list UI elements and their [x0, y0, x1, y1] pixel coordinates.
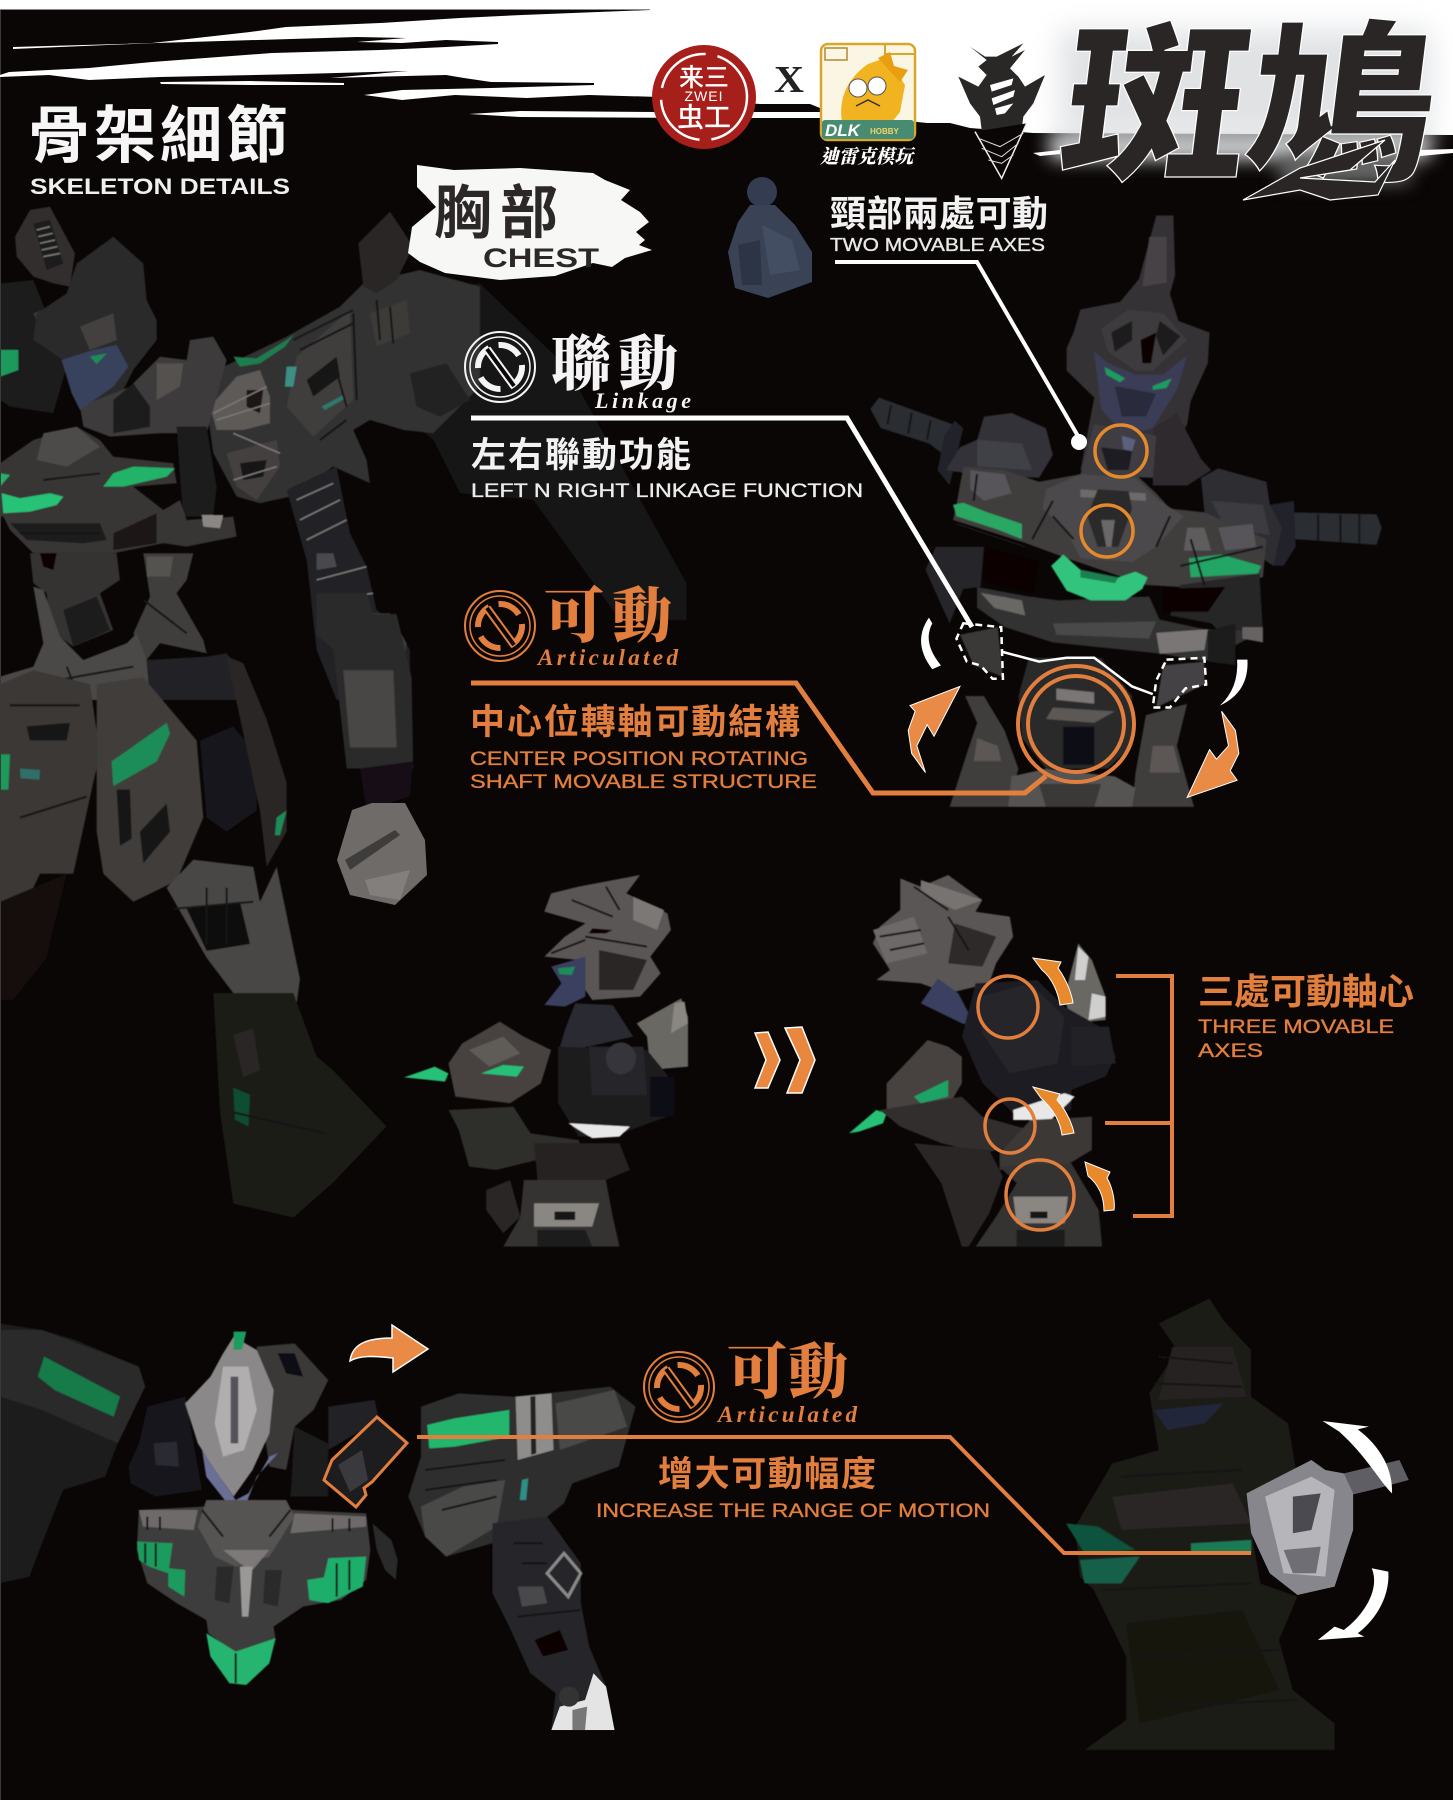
brush patch: chest — [408, 165, 652, 280]
heading: skeleton details: 骨架細節 — [28, 102, 288, 171]
centre axis text — [470, 703, 817, 793]
cross mark: X — [774, 59, 804, 101]
heading: skeleton details: SKELETON DETAILS — [30, 174, 290, 199]
white leader: neck — [835, 262, 1087, 450]
DLK chinese label: 迪雷克模玩 — [819, 146, 916, 168]
linkage text: 左右聯動功能 — [471, 436, 691, 475]
bottom middle forearm — [408, 1387, 636, 1730]
orange leader: centre axis — [471, 683, 1046, 793]
dashed linkage boxes and connector — [956, 623, 1206, 708]
faded lower body — [0, 593, 413, 1218]
logo: ZWEI round badge — [652, 45, 756, 149]
silver shoulder — [1247, 1460, 1409, 1595]
neck callout text: TWO MOVABLE AXES — [830, 235, 1045, 255]
three axes text — [1198, 971, 1414, 1062]
logo: DLK hobby card — [821, 44, 915, 140]
faded upper body — [0, 207, 687, 700]
side robot: before — [404, 875, 688, 1247]
bracket — [1105, 976, 1172, 1216]
three axes text: 三處可動軸心 — [1198, 971, 1414, 1012]
orange rotation arrows — [908, 686, 1239, 797]
logo: ZWEI round badge: ZWEI — [684, 88, 724, 104]
range of motion text: INCREASE THE RANGE OF MOTION — [596, 1501, 990, 1522]
logo: DLK hobby card: HOBBY — [870, 127, 900, 136]
white hand — [551, 1673, 615, 1730]
brush patch: chest: CHEST — [483, 243, 600, 273]
faded full robot — [0, 207, 687, 1218]
white leader: linkage — [471, 418, 972, 627]
three axes text: AXES — [1198, 1041, 1263, 1062]
range of motion text — [596, 1455, 990, 1522]
neck bust part — [728, 177, 812, 298]
articulated icon — [465, 591, 535, 661]
brush header band — [0, 0, 1453, 135]
linkage text: LEFT N RIGHT LINKAGE FUNCTION — [471, 481, 863, 502]
articulated heading: 可動 — [544, 584, 672, 650]
logo: shield emblem — [958, 43, 1045, 178]
double chevron arrow — [755, 1027, 815, 1093]
three axes text: THREE MOVABLE — [1198, 1017, 1394, 1038]
title calligraphy: 斑鳩 — [1051, 11, 1447, 203]
white rotation arrows — [921, 618, 1248, 706]
articulated heading lower — [716, 1340, 858, 1427]
range of motion text: 增大可動幅度 — [658, 1455, 876, 1494]
side robot: after — [849, 875, 1116, 1247]
motion hexagon outline — [324, 1417, 407, 1507]
three joint circles — [978, 976, 1074, 1230]
white swing arrows — [1318, 1421, 1392, 1640]
linkage heading: Linkage — [594, 388, 691, 413]
neck callout text — [830, 193, 1048, 255]
articulated icon lower — [644, 1352, 714, 1422]
articulated heading lower: Articulated — [716, 1402, 858, 1427]
centre axis text: CENTER POSITION ROTATING — [470, 749, 808, 770]
neck joint circles — [1081, 425, 1147, 557]
logo: ZWEI round badge: 来三 — [679, 64, 729, 92]
orange motion arrow — [350, 1325, 428, 1372]
logo: ZWEI round badge: 虫工 — [677, 103, 731, 133]
brush patch: chest: 胸部 — [434, 181, 558, 246]
linkage text — [471, 436, 863, 502]
bottom left arm and chest robot — [0, 1323, 398, 1685]
faded fist — [337, 803, 427, 905]
neck callout text: 頸部兩處可動 — [830, 193, 1048, 234]
centre torso robot — [870, 216, 1382, 807]
small curved arrows — [1033, 958, 1114, 1211]
centre axis text: SHAFT MOVABLE STRUCTURE — [470, 772, 817, 793]
articulated heading — [536, 584, 678, 670]
orange leader: range of motion — [417, 1437, 1251, 1553]
waist double circle — [1018, 666, 1134, 782]
articulated heading: Articulated — [536, 645, 678, 670]
title glow — [1033, 30, 1453, 183]
centre axis text: 中心位轉軸可動結構 — [470, 703, 800, 742]
articulated heading lower: 可動 — [727, 1340, 848, 1406]
logo: DLK hobby card: DLK — [825, 121, 862, 140]
linkage icon — [465, 332, 535, 402]
linkage heading: 聯動 — [551, 332, 678, 398]
bottom right dark robot — [1066, 1298, 1335, 1750]
